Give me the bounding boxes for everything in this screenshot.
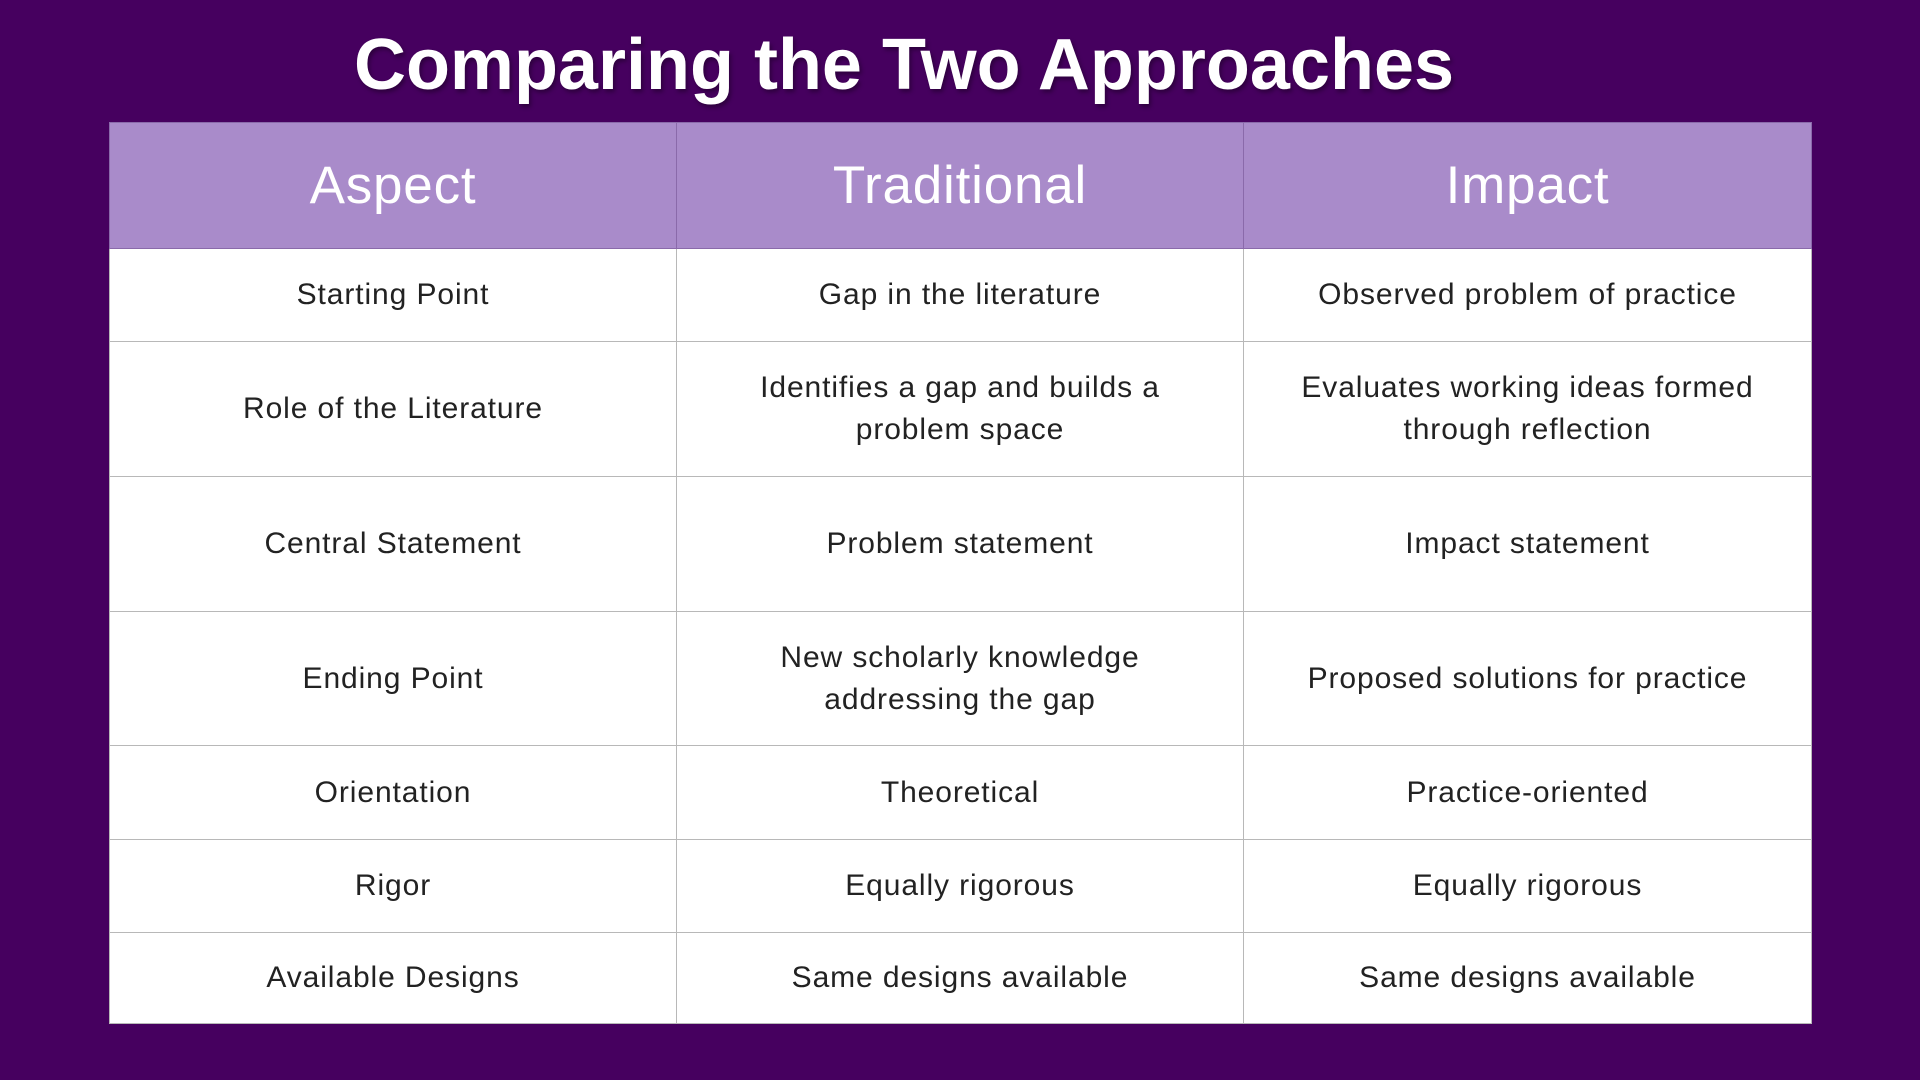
- comparison table: Gap in the literature: [819, 278, 1101, 311]
- comparison table: Aspect: [310, 156, 476, 214]
- comparison table: Role of the Literature: [243, 392, 543, 425]
- comparison table: Traditional: [833, 156, 1087, 214]
- comparison table: Practice-oriented: [1406, 776, 1649, 808]
- comparison table: Central Statement: [264, 527, 522, 560]
- comparison table: Equally rigorous: [1413, 869, 1642, 902]
- comparison table: through reflection: [1403, 413, 1652, 446]
- comparison table: Proposed solutions for practice: [1308, 662, 1747, 694]
- comparison table: Starting Point: [297, 278, 489, 311]
- comparison table: Available Designs: [266, 961, 520, 994]
- comparison table: Impact: [1446, 156, 1609, 214]
- comparison table: Equally rigorous: [845, 869, 1075, 902]
- title: Comparing the Two Approaches: [354, 25, 1454, 105]
- comparison table: Evaluates working ideas formed: [1301, 371, 1754, 404]
- comparison table: New scholarly knowledge: [780, 640, 1140, 674]
- comparison table: Observed problem of practice: [1318, 278, 1737, 311]
- comparison table: Identifies a gap and builds a: [760, 371, 1160, 404]
- comparison table: [109, 122, 1812, 1024]
- comparison table: Same designs available: [1359, 961, 1696, 994]
- comparison table: Theoretical: [881, 776, 1039, 808]
- comparison table: Rigor: [355, 869, 431, 902]
- comparison table: addressing the gap: [824, 682, 1096, 716]
- comparison table: problem space: [856, 413, 1064, 446]
- comparison table: Ending Point: [303, 662, 483, 694]
- comparison table: Orientation: [315, 776, 471, 808]
- comparison table: Impact statement: [1405, 527, 1650, 560]
- comparison table: Problem statement: [826, 527, 1094, 560]
- comparison table: Same designs available: [792, 961, 1128, 994]
